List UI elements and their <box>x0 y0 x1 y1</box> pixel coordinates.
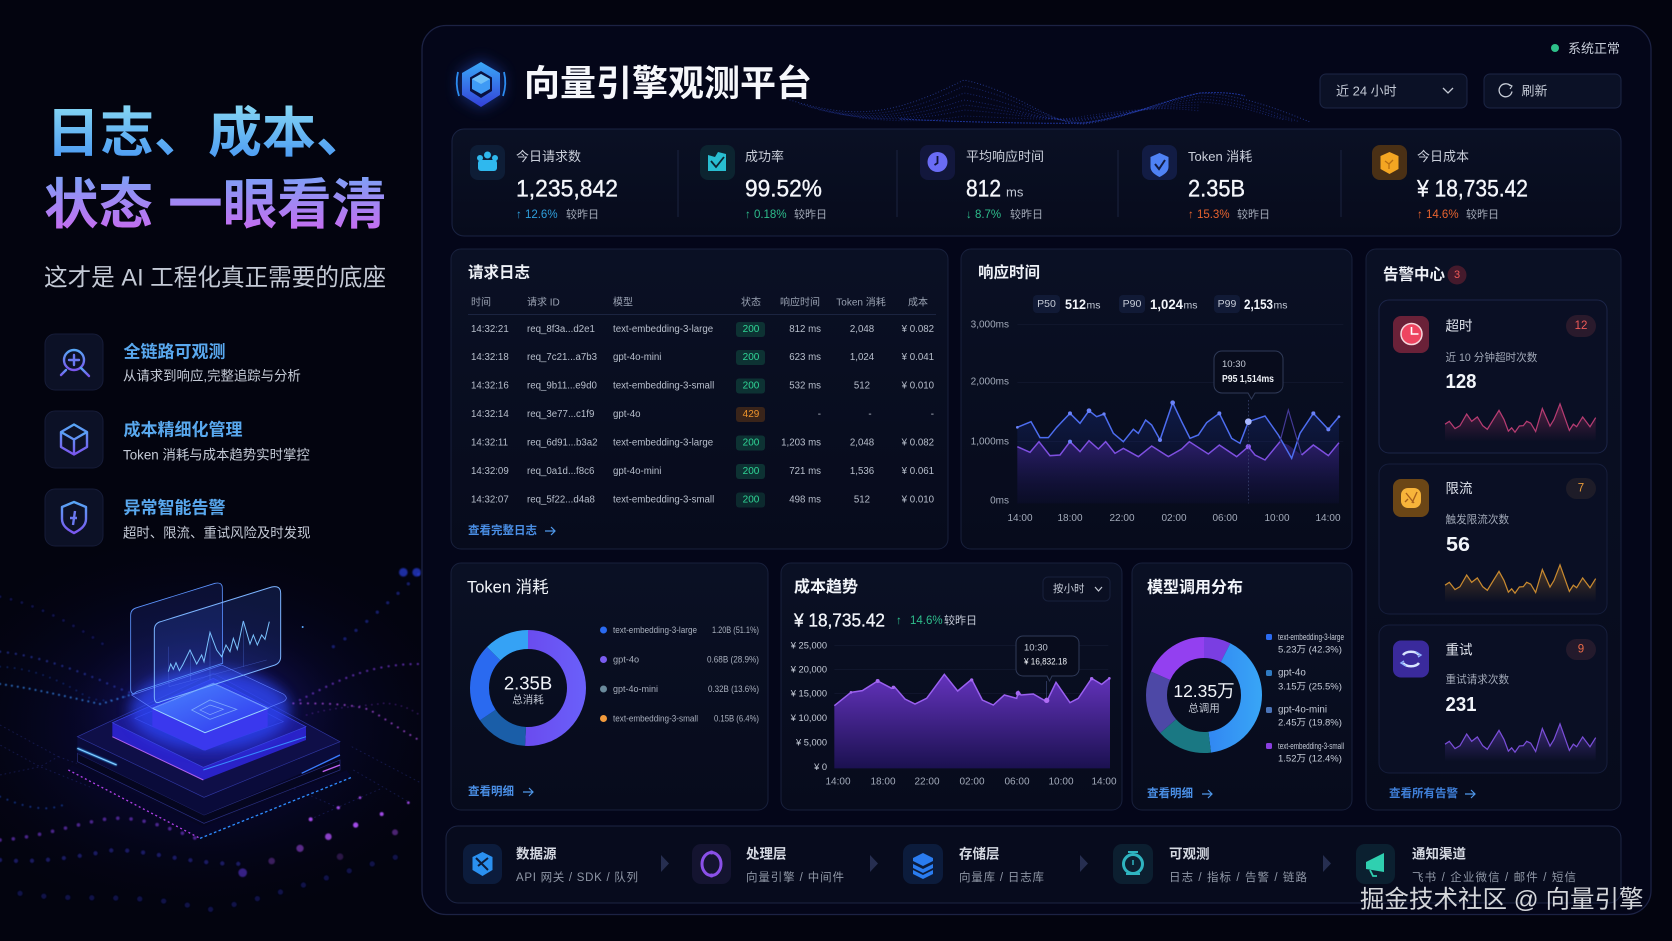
bottom slabs <box>77 753 340 823</box>
percentile: P50: P50 <box>1037 298 1056 310</box>
icon: cube <box>61 424 87 454</box>
legend: text-embedding-3-small <box>1278 741 1344 751</box>
chart: cost area: 14:00 <box>1091 776 1117 788</box>
chart: cost area: 06:00 <box>1004 776 1030 788</box>
chart: token donut <box>480 640 576 736</box>
icon: platform logo <box>457 59 505 109</box>
step: notification: 飞书 / 企业微信 / 邮件 / 短信 <box>1412 870 1576 884</box>
KPI: average response time: ↓ 8.7% <box>966 209 1001 221</box>
title: main heading <box>44 104 386 236</box>
link: full log: 查看完整日志 <box>468 523 537 537</box>
KPI: average response time: 平均响应时间 <box>966 149 1044 164</box>
chart: response time lines: 14:00 <box>1007 513 1033 524</box>
panel: pipeline bar <box>446 826 1621 903</box>
panel: model call distribution <box>1132 563 1352 810</box>
KPI: daily cost: 今日成本 <box>1417 149 1469 164</box>
table row: text-embedding-3-large <box>613 438 713 448</box>
feature: cost management <box>45 411 310 468</box>
value: ↑ <box>896 615 902 627</box>
table row: req_6d91...b3a2 <box>527 438 598 448</box>
table row: - <box>818 409 821 420</box>
chart: response time lines: 02:00 <box>1161 513 1187 524</box>
control: refresh button: 刷新 <box>1522 84 1548 98</box>
card: rate limit alert: 56 <box>1446 534 1470 556</box>
panel: main dashboard frame <box>422 26 1651 914</box>
table row: ¥ 0.082 <box>901 438 934 448</box>
percentile: P50 <box>1033 295 1100 313</box>
value: ¥ 18,735.42 <box>793 610 885 630</box>
control: time range select: 近 24 小时 <box>1336 84 1397 98</box>
KPI: token consumption: 2.35B <box>1188 176 1245 202</box>
chart: response time lines: 10:00 <box>1264 513 1290 524</box>
percentile: P90 <box>1119 295 1198 313</box>
status indicator: 系统正常 <box>1568 41 1620 56</box>
tooltip: 10:30 <box>1222 359 1246 370</box>
table row: 200 <box>743 438 760 448</box>
table row: text-embedding-3-large <box>613 324 713 335</box>
chart: response time lines: 06:00 <box>1212 513 1238 524</box>
feature: cost management: Token 消耗与成本趋势实时掌控 <box>123 448 310 462</box>
table row: 812 ms <box>789 324 821 335</box>
step: processing: 处理层 <box>746 846 786 862</box>
table row: ¥ 0.082 <box>901 324 934 335</box>
chart: response time lines: 22:00 <box>1109 513 1135 524</box>
percentile: P90: 1,024 <box>1150 296 1183 312</box>
icon: shield <box>62 502 86 533</box>
sparkline <box>1445 404 1596 441</box>
table row: 200 <box>743 352 760 363</box>
chart: model donut: 12.35万 <box>1173 681 1235 701</box>
table row: req_8f3a...d2e1 <box>527 324 595 335</box>
table row <box>471 350 934 365</box>
KPI: daily cost <box>1372 145 1528 221</box>
card: rate limit alert: 7 <box>1578 482 1584 494</box>
percentile: P99: ms <box>1274 300 1288 312</box>
chart: response time lines: 18:00 <box>1057 513 1083 524</box>
KPI: requests: 较昨日 <box>566 207 599 221</box>
step: notification: 通知渠道 <box>1412 846 1466 862</box>
KPI: success rate: 较昨日 <box>794 207 827 221</box>
KPI: requests: 今日请求数 <box>516 149 581 164</box>
table row <box>471 436 934 450</box>
KPI: average response time <box>920 145 1044 221</box>
table row <box>471 322 934 337</box>
percentile: P99: 2,153 <box>1244 296 1273 312</box>
panel: left hero column <box>0 104 487 927</box>
chart: cost area: ¥ 5,000 <box>795 738 827 748</box>
chart: token donut: 总消耗 <box>512 693 544 706</box>
heading: 告警中心 <box>1383 266 1446 284</box>
control: time range select <box>1320 74 1467 108</box>
sparkline <box>1445 565 1596 602</box>
legend: gpt-4o <box>1278 668 1306 678</box>
heading: 3 <box>1454 269 1460 281</box>
percentile: P99 <box>1214 295 1288 313</box>
table row: 14:32:18 <box>471 352 509 363</box>
chart: response time lines: 0ms <box>990 496 1009 506</box>
card: retry alert: 231 <box>1446 694 1476 716</box>
front glass panel <box>154 587 281 703</box>
chart: cost area: 02:00 <box>959 776 985 788</box>
table row: 14:32:07 <box>471 494 509 506</box>
panel: request log <box>451 249 948 549</box>
subtitle: 这才是 AI 工程化真正需要的底座 <box>44 264 386 292</box>
KPI: requests: ↑ 12.6% <box>516 209 558 221</box>
KPI: daily cost: ¥ 18,735.42 <box>1416 176 1528 202</box>
card: retry alert <box>1379 625 1607 773</box>
legend: 5.23万 (42.3%) <box>1278 644 1342 656</box>
percentile: P50: 512 <box>1065 296 1086 312</box>
tooltip <box>1016 636 1079 681</box>
panel: response time <box>961 249 1352 549</box>
chart: model donut <box>1156 648 1252 742</box>
table row: 14:32:09 <box>471 466 509 477</box>
KPI: average response time: 812 <box>966 176 1001 202</box>
KPI: success rate: 成功率 <box>745 149 784 164</box>
KPI: token consumption <box>1142 145 1270 221</box>
middle slab <box>112 723 306 780</box>
table row <box>471 407 934 422</box>
chart: response time lines: 1,000ms <box>971 436 1009 448</box>
chart: cost area: 22:00 <box>914 776 940 788</box>
tooltip: ¥ 16,832.18 <box>1023 656 1067 668</box>
icon: timer <box>1393 316 1429 353</box>
step: storage: 存储层 <box>959 846 1000 862</box>
heading <box>1383 266 1466 284</box>
KPI: requests <box>470 145 618 221</box>
arrow <box>661 855 669 872</box>
arrow <box>1080 855 1088 872</box>
back glass panel <box>131 583 223 693</box>
step: data source <box>463 844 638 884</box>
card: timeout alert <box>1379 300 1607 453</box>
legend <box>1266 632 1344 764</box>
step: observability <box>1113 844 1308 884</box>
link: model details <box>1147 786 1212 800</box>
table row: - <box>931 409 934 420</box>
feature: full-chain observability: 从请求到响应,完整追踪与分析 <box>123 368 301 384</box>
chart: response time lines: 3,000ms <box>971 320 1009 330</box>
table row: gpt-4o-mini <box>613 352 661 363</box>
title: main heading: 状态 一眼看清 <box>44 174 386 236</box>
table row: 200 <box>743 324 760 335</box>
table row: req_0a1d...f8c6 <box>527 466 594 477</box>
base outline <box>68 765 352 838</box>
tooltip <box>1214 351 1283 399</box>
legend: 0.15B (6.4%) <box>714 714 759 724</box>
chart: response time lines: 2,000ms <box>971 376 1009 388</box>
step: storage <box>903 844 1044 884</box>
watermark: 掘金技术社区 @ 向量引擎 <box>1360 886 1643 914</box>
link: model details: 查看明细 <box>1147 786 1193 800</box>
link: token details <box>468 784 533 798</box>
table header: 请求 ID <box>527 296 560 308</box>
table header: 响应时间 <box>780 296 820 308</box>
value <box>793 610 977 630</box>
value: 14.6% <box>910 615 943 627</box>
header <box>457 41 1621 109</box>
title: main heading: 日志、成本、 <box>46 104 370 164</box>
card: timeout alert: 128 <box>1446 371 1476 393</box>
arrow <box>870 855 878 872</box>
table row: 14:32:16 <box>471 380 509 392</box>
step: data source: API 网关 / SDK / 队列 <box>516 870 638 884</box>
table header: 模型 <box>613 296 633 308</box>
card: rate limit alert: 触发限流次数 <box>1446 513 1509 526</box>
table row: ¥ 0.041 <box>901 352 934 363</box>
percentile: P99: P99 <box>1218 298 1236 310</box>
KPI: daily cost: ↑ 14.6% <box>1417 209 1459 221</box>
legend: text-embedding-3-large <box>613 625 697 635</box>
card: rate limit alert <box>1379 464 1607 614</box>
card: timeout alert: 近 10 分钟超时次数 <box>1446 351 1538 364</box>
chart: model donut: 总调用 <box>1188 702 1220 714</box>
step: observability: 可观测 <box>1169 846 1210 862</box>
percentile: P90: P90 <box>1123 298 1141 310</box>
table row: 623 ms <box>789 352 821 363</box>
KPI: token consumption: ↑ 15.3% <box>1188 209 1230 221</box>
panel: token consumption <box>451 563 768 810</box>
KPI: average response time: 较昨日 <box>1010 207 1043 221</box>
table row: 512 <box>854 494 870 506</box>
table row: 14:32:11 <box>471 438 508 448</box>
percentile: P50: ms <box>1086 300 1100 312</box>
chart: cost area: 10:00 <box>1048 776 1074 788</box>
link: all alerts <box>1389 786 1475 800</box>
icon: rate limit <box>1393 479 1429 517</box>
legend: 0.32B (13.6%) <box>708 684 759 694</box>
panel: cost trend <box>781 563 1122 810</box>
sparkline <box>1445 724 1596 761</box>
card: retry alert: 重试 <box>1446 642 1473 658</box>
legend: 1.52万 (12.4%) <box>1278 754 1342 764</box>
table row: req_5f22...d4a8 <box>527 494 595 506</box>
table row: 200 <box>743 494 760 506</box>
table row: 532 ms <box>789 380 821 392</box>
KPI: success rate <box>700 145 827 221</box>
table row: ¥ 0.061 <box>901 466 934 477</box>
table header: 成本 <box>908 296 928 308</box>
legend: 0.68B (28.9%) <box>707 654 759 664</box>
legend: text-embedding-3-large <box>1278 632 1344 642</box>
percentile: P90: ms <box>1184 300 1198 312</box>
chart: cost area: ¥ 20,000 <box>790 664 827 674</box>
table row: 1,536 <box>850 466 874 477</box>
tooltip: 10:30 <box>1024 642 1048 654</box>
step: observability: 日志 / 指标 / 告警 / 链路 <box>1169 870 1308 884</box>
link: full log <box>468 523 555 537</box>
feature: cost management: 成本精细化管理 <box>124 420 242 440</box>
card: retry alert: 重试请求次数 <box>1446 673 1509 686</box>
decorative wave highlight <box>900 93 1245 123</box>
table row: gpt-4o-mini <box>613 466 661 477</box>
step: storage: 向量库 / 日志库 <box>959 870 1044 884</box>
arrow <box>1323 855 1331 872</box>
table row: req_9b11...e9d0 <box>527 380 597 392</box>
table row: 429 <box>743 409 760 420</box>
chart: cost area: ¥ 0 <box>813 762 827 772</box>
legend <box>600 625 759 724</box>
heading: 成本趋势 <box>794 577 858 596</box>
table row: 200 <box>743 380 760 392</box>
KPI: average response time: ms <box>1006 184 1024 200</box>
KPI: token consumption: Token 消耗 <box>1188 149 1252 164</box>
heading: 模型调用分布 <box>1147 578 1243 596</box>
table row <box>471 464 934 479</box>
table row: 1,203 ms <box>781 438 821 448</box>
chart: response time lines <box>971 320 1343 524</box>
KPI: success rate: ↑ 0.18% <box>745 209 787 221</box>
step: processing <box>692 844 844 884</box>
tooltip: P95 1,514ms <box>1222 374 1274 385</box>
table row: req_3e77...c1f9 <box>527 409 594 420</box>
table header: 时间 <box>471 296 491 308</box>
KPI: token consumption: 较昨日 <box>1237 207 1270 221</box>
chart: cost area: 14:00 <box>825 776 851 788</box>
decorative dotted wave <box>790 80 1310 124</box>
card: rate limit alert: 限流 <box>1446 481 1473 496</box>
table row: ¥ 0.010 <box>901 494 935 506</box>
chart: cost area: ¥ 10,000 <box>790 713 827 723</box>
feature: intelligent alerts <box>45 489 310 546</box>
table row: req_7c21...a7b3 <box>527 352 597 363</box>
feature: full-chain observability: 全链路可观测 <box>124 342 226 362</box>
table header: 状态 <box>741 296 761 308</box>
legend: gpt-4o-mini <box>1278 704 1327 716</box>
table row <box>471 378 935 394</box>
legend: gpt-4o <box>613 654 639 664</box>
legend: gpt-4o-mini <box>613 684 658 694</box>
link: token details: 查看明细 <box>468 784 514 798</box>
legend: text-embedding-3-small <box>613 714 698 724</box>
table row: text-embedding-3-small <box>613 494 714 506</box>
heading: 请求日志 <box>468 262 530 282</box>
step: processing: 向量引擎 / 中间件 <box>746 870 844 884</box>
table row: 498 ms <box>789 494 821 506</box>
icon: magnifier <box>61 350 89 376</box>
control: refresh button <box>1484 74 1621 108</box>
title: platform name: 向量引擎观测平台 <box>524 62 812 104</box>
card: timeout alert: 超时 <box>1446 318 1472 334</box>
table row: 721 ms <box>789 466 821 477</box>
chart: cost area: ¥ 25,000 <box>790 640 827 650</box>
link: all alerts: 查看所有告警 <box>1389 786 1458 800</box>
legend: 1.20B (51.1%) <box>712 625 759 635</box>
feature: full-chain observability <box>45 334 301 390</box>
panel: KPI bar <box>452 129 1621 236</box>
table row: 2,048 <box>850 438 874 448</box>
control: hourly select <box>1043 577 1110 601</box>
illustration: isometric platform with glass chart panels <box>0 527 487 927</box>
value: 较昨日 <box>944 613 977 627</box>
legend: 2.45万 (19.8%) <box>1278 718 1342 728</box>
table header: Token 消耗 <box>836 296 886 308</box>
legend: 3.15万 (25.5%) <box>1278 682 1342 692</box>
control: hourly select: 按小时 <box>1053 582 1085 595</box>
card: timeout alert: 12 <box>1575 320 1587 332</box>
table row: ¥ 0.010 <box>901 380 935 392</box>
table row: - <box>868 409 872 420</box>
step: notification <box>1356 844 1576 884</box>
KPI: daily cost: 较昨日 <box>1466 207 1499 221</box>
chart: cost area: 18:00 <box>870 776 896 788</box>
step: data source: 数据源 <box>516 846 557 862</box>
chart: cost area: ¥ 15,000 <box>790 688 827 698</box>
chart: response time lines: 14:00 <box>1315 513 1341 524</box>
table row: 200 <box>743 466 760 477</box>
chart: cost area <box>790 640 1117 788</box>
table row: text-embedding-3-small <box>613 380 714 392</box>
card: retry alert: 9 <box>1578 644 1584 656</box>
table row: 14:32:14 <box>471 409 509 420</box>
table row: 512 <box>854 380 870 392</box>
table row: gpt-4o <box>613 409 640 420</box>
icon: retry <box>1393 640 1429 678</box>
feature: intelligent alerts: 超时、限流、重试风险及时发现 <box>123 526 310 540</box>
feature: intelligent alerts: 异常智能告警 <box>124 498 226 518</box>
table header <box>471 296 928 308</box>
panel: alert center <box>1366 249 1621 810</box>
table row: 2,048 <box>850 324 874 335</box>
KPI: success rate: 99.52% <box>745 176 822 202</box>
heading: 响应时间 <box>978 262 1040 282</box>
table row: 14:32:21 <box>471 324 509 335</box>
heading: Token 消耗 <box>467 578 549 596</box>
KPI: requests: 1,235,842 <box>516 176 618 202</box>
chart: token donut: 2.35B <box>504 672 552 694</box>
table row <box>471 492 935 508</box>
top chip <box>130 670 290 750</box>
table row: 1,024 <box>850 352 875 363</box>
